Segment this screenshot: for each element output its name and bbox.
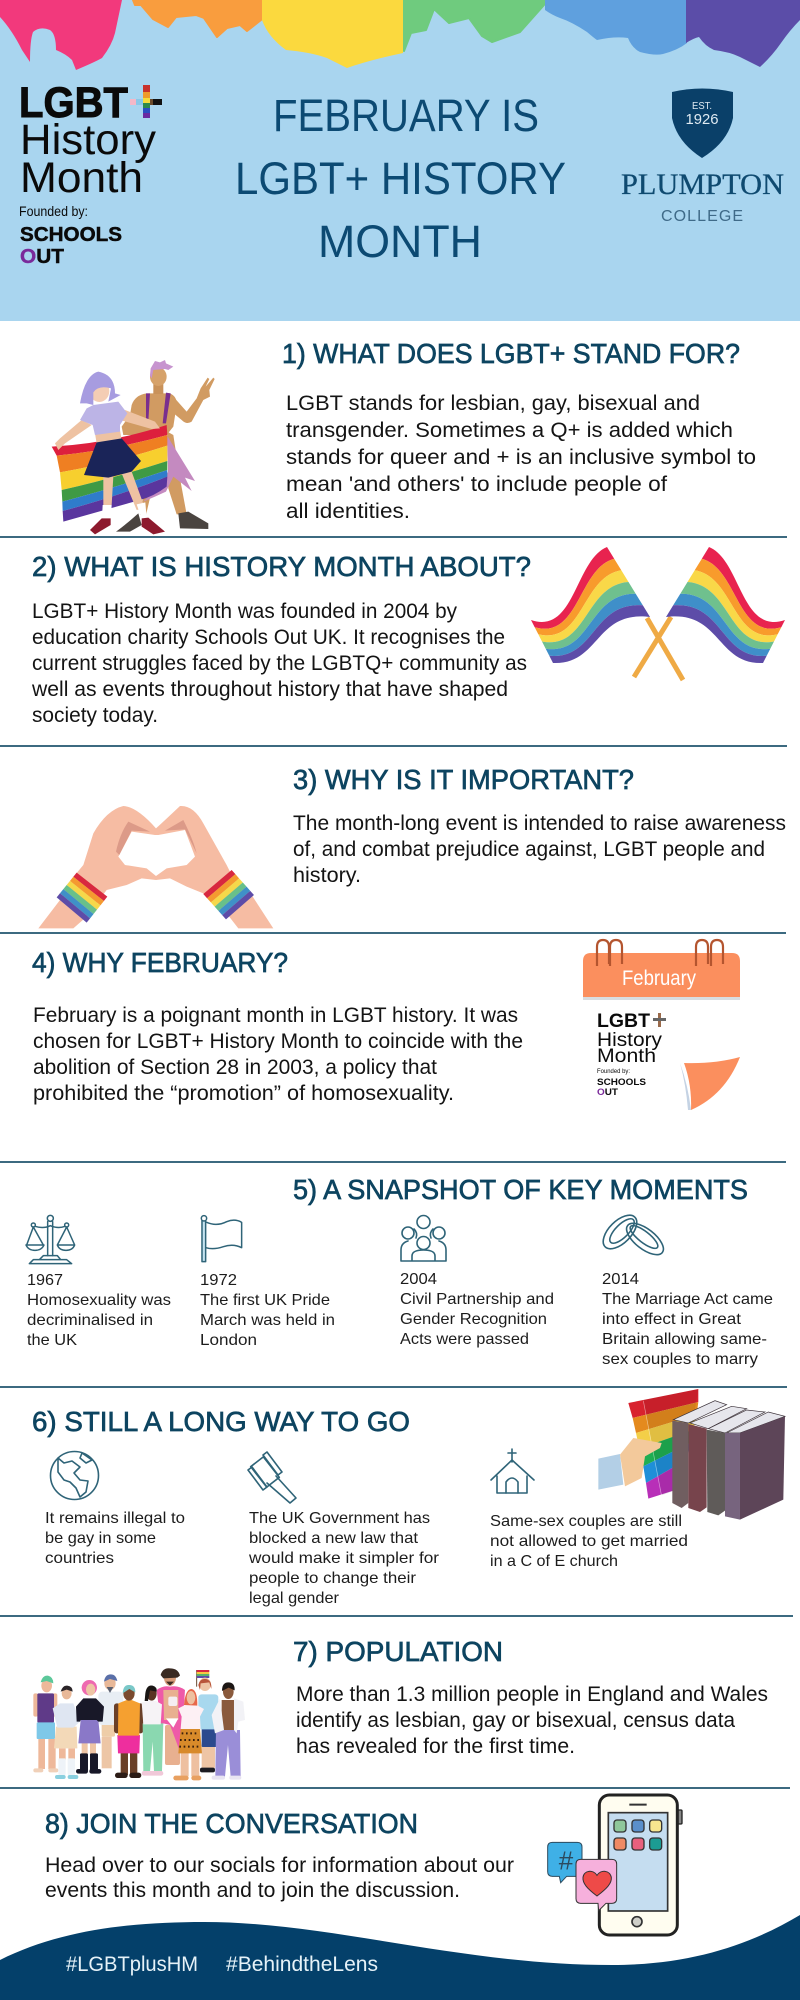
LGBT+ History Month logo: OUT xyxy=(20,246,64,268)
heading 2: 2) WHAT IS HISTORY MONTH ABOUT? xyxy=(32,551,531,582)
point: UK Government blocked law: The UK Government has xyxy=(249,1510,430,1527)
moment: 1967: the UK xyxy=(27,1332,77,1349)
small LGBT+ History Month logo xyxy=(597,1010,666,1098)
body text 8: events this month and to join the discussion. xyxy=(45,1879,460,1902)
body text 1: stands for queer and + is an inclusive symbol to xyxy=(286,446,756,469)
moment: 1972: London xyxy=(200,1332,257,1349)
illustration: hand holding rainbow book beside stacked books xyxy=(598,1389,785,1520)
icon: heart bubble xyxy=(576,1859,617,1911)
body text 7: identify as lesbian, gay or bisexual, census data xyxy=(296,1709,735,1732)
moment: 2004 xyxy=(400,1271,554,1348)
panel: population xyxy=(33,1636,768,1780)
point: illegal in some countries xyxy=(45,1510,185,1567)
moment: 2004: Acts were passed xyxy=(400,1331,529,1348)
icon: hashtag bubble: # xyxy=(559,1845,574,1875)
moment: 2014: The Marriage Act came xyxy=(602,1291,773,1308)
moment: 1972: March was held in xyxy=(200,1312,335,1329)
moment: 1967 xyxy=(27,1272,171,1349)
body text 4 xyxy=(33,1004,523,1105)
heading 1: 1) WHAT DOES LGBT+ STAND FOR? xyxy=(282,338,740,369)
body text 2: well as events throughout history that have shaped xyxy=(31,678,508,701)
panel: join the conversation xyxy=(45,1795,682,1935)
Plumpton College logo: 1926 xyxy=(686,111,718,128)
heading 6: 6) STILL A LONG WAY TO GO xyxy=(32,1406,410,1437)
moment: 1972: The first UK Pride xyxy=(200,1292,330,1309)
body text 4: February is a poignant month in LGBT history. It was xyxy=(33,1004,518,1027)
illustration: phone with social bubbles xyxy=(548,1795,682,1935)
icon: wedding rings xyxy=(597,1209,668,1260)
hashtags xyxy=(66,1953,378,1976)
small LGBT+ History Month logo: History xyxy=(597,1029,662,1051)
point: same-sex marriage in church: not allowed to get married xyxy=(490,1533,688,1550)
moment: 2004: Gender Recognition xyxy=(400,1311,547,1328)
moment: 2004: 2004 xyxy=(400,1271,437,1288)
point: UK Government blocked law xyxy=(248,1510,440,1607)
heading 5: 5) A SNAPSHOT OF KEY MOMENTS xyxy=(293,1174,748,1205)
body text 2: society today. xyxy=(32,704,158,727)
heading 3: 3) WHY IS IT IMPORTANT? xyxy=(293,764,634,795)
rainbow paint drips xyxy=(0,0,800,70)
body text 2 xyxy=(31,600,527,727)
icon: gavel xyxy=(248,1452,296,1503)
heading 4: 4) WHY FEBRUARY? xyxy=(32,947,288,978)
body text 3 xyxy=(293,812,786,887)
body text 2: LGBT+ History Month was founded in 2004 by xyxy=(32,600,457,623)
title: LGBT+ HISTORY xyxy=(235,153,566,204)
LGBT+ History Month logo: Month xyxy=(20,154,143,202)
panel: still a long way to go xyxy=(32,1389,785,1607)
moment: 1967: 1967 xyxy=(27,1272,63,1289)
point: illegal in some countries: It remains illegal to xyxy=(45,1510,185,1527)
panel: why February xyxy=(32,940,740,1110)
illustration: heart hands with rainbow wristbands xyxy=(38,806,273,928)
moment: 2014: Britain allowing same- xyxy=(602,1331,767,1348)
small LGBT+ History Month logo: Month xyxy=(597,1045,656,1067)
icon: globe xyxy=(50,1452,98,1500)
body text 7: has revealed for the first time. xyxy=(296,1735,575,1758)
body text 8: Head over to our socials for information about our xyxy=(45,1854,514,1877)
body text 1: LGBT stands for lesbian, gay, bisexual and xyxy=(286,392,700,415)
moment: 1967: Homosexuality was xyxy=(27,1292,171,1309)
moment: 2014: sex couples to marry xyxy=(602,1351,758,1368)
illustration: crossed rainbow flags xyxy=(531,547,785,680)
moment: 1972: 1972 xyxy=(200,1272,237,1289)
LGBT+ History Month logo xyxy=(19,79,162,268)
panel: what does LGBT+ stand for xyxy=(52,338,756,534)
small LGBT+ History Month logo: SCHOOLS xyxy=(597,1077,646,1088)
point: UK Government blocked law: legal gender xyxy=(249,1590,340,1607)
LGBT+ History Month logo: SCHOOLS xyxy=(20,224,122,246)
body text 3: history. xyxy=(293,864,361,887)
heading 8: 8) JOIN THE CONVERSATION xyxy=(45,1808,418,1839)
body text 7 xyxy=(296,1683,768,1758)
point: illegal in some countries: be gay in some xyxy=(45,1530,156,1547)
point: UK Government blocked law: would make it simpler for xyxy=(248,1550,440,1567)
body text 3: of, and combat prejudice against, LGBT people and xyxy=(293,838,765,861)
footer wave xyxy=(0,1915,800,2000)
body text 1: mean 'and others' to include people of xyxy=(286,473,667,496)
hashtags: #BehindtheLens xyxy=(226,1953,378,1976)
title xyxy=(235,90,566,267)
Plumpton College logo: EST. xyxy=(692,101,712,112)
LGBT+ History Month logo: LGBT xyxy=(19,79,128,127)
moment: 1972 xyxy=(200,1272,335,1349)
body text 4: prohibited the “promotion” of homosexuality. xyxy=(33,1082,454,1105)
title: FEBRUARY IS xyxy=(273,90,539,141)
LGBT+ History Month logo: History xyxy=(20,116,156,164)
point: same-sex marriage in church xyxy=(490,1513,688,1570)
panel: snapshot of key moments xyxy=(26,1174,773,1368)
body text 3: The month-long event is intended to raise awareness xyxy=(293,812,786,835)
panel: what is history month about xyxy=(31,547,785,727)
point: same-sex marriage in church: Same-sex couples are still xyxy=(490,1513,682,1530)
heading 7: 7) POPULATION xyxy=(293,1636,503,1667)
icon: group of people xyxy=(401,1216,446,1261)
illustration: February calendar xyxy=(583,940,740,1110)
body text 2: current struggles faced by the LGBTQ+ community as xyxy=(32,652,527,675)
panel: why is it important xyxy=(38,764,786,928)
illustration: diverse crowd of people xyxy=(33,1668,245,1780)
body text 1 xyxy=(286,392,756,523)
small LGBT+ History Month logo: LGBT xyxy=(597,1010,650,1032)
body text 1: transgender. Sometimes a Q+ is added which xyxy=(286,419,733,442)
calendar page curl xyxy=(680,1057,740,1110)
illustration: February calendar: February xyxy=(622,967,696,990)
Plumpton College logo xyxy=(621,88,784,225)
moment: 1967: decriminalised in xyxy=(27,1312,153,1329)
point: UK Government blocked law: people to change their xyxy=(249,1570,417,1587)
body text 4: abolition of Section 28 in 2003, a policy that xyxy=(33,1056,437,1079)
point: illegal in some countries: countries xyxy=(45,1550,114,1567)
illustration: couple with rainbow flag xyxy=(52,360,215,534)
moment: 2014 xyxy=(602,1271,773,1368)
small LGBT+ History Month logo: Founded by: xyxy=(597,1069,630,1075)
Plumpton College logo: COLLEGE xyxy=(661,208,743,225)
point: UK Government blocked law: blocked a new law that xyxy=(249,1530,419,1547)
moment: 2014: 2014 xyxy=(602,1271,639,1288)
moment: 2014: into effect in Great xyxy=(602,1311,742,1328)
icon: scales of justice xyxy=(26,1215,75,1264)
icon: church xyxy=(491,1449,534,1493)
body text 4: chosen for LGBT+ History Month to coincide with the xyxy=(33,1030,523,1053)
Plumpton College logo: PLUMPTON xyxy=(621,168,784,201)
small LGBT+ History Month logo: OUT xyxy=(597,1087,618,1098)
body text 2: education charity Schools Out UK. It recognises the xyxy=(32,626,505,649)
title: MONTH xyxy=(318,216,482,267)
LGBT+ History Month logo: Founded by: xyxy=(19,204,88,219)
hashtags: #LGBTplusHM xyxy=(66,1953,198,1976)
icon: flag xyxy=(201,1216,242,1262)
body text 1: all identities. xyxy=(286,500,410,523)
point: same-sex marriage in church: in a C of E church xyxy=(490,1553,618,1570)
moment: 2004: Civil Partnership and xyxy=(400,1291,554,1308)
body text 8 xyxy=(45,1854,514,1902)
body text 7: More than 1.3 million people in England and Wales xyxy=(296,1683,768,1706)
header banner xyxy=(0,0,800,321)
